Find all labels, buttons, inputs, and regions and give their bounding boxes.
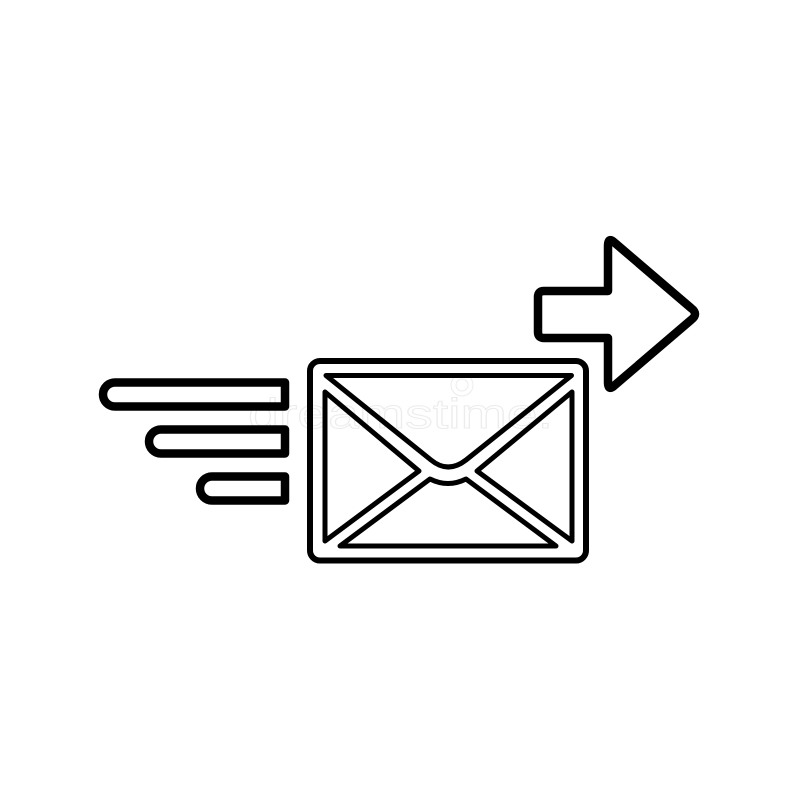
icon: speed lines	[103, 382, 285, 501]
envelope left panel	[325, 392, 419, 541]
watermark: dreamstime.	[248, 390, 553, 437]
envelope flap	[326, 376, 572, 467]
envelope outer frame	[310, 361, 586, 560]
speed line medium	[149, 430, 285, 454]
speed line short	[200, 476, 285, 501]
envelope bottom panel	[340, 479, 556, 546]
speed line long	[103, 382, 285, 406]
icon: arrow pointing right	[538, 240, 695, 388]
icon: envelope	[310, 361, 586, 560]
envelope right panel	[477, 392, 572, 541]
watermark	[248, 374, 553, 437]
